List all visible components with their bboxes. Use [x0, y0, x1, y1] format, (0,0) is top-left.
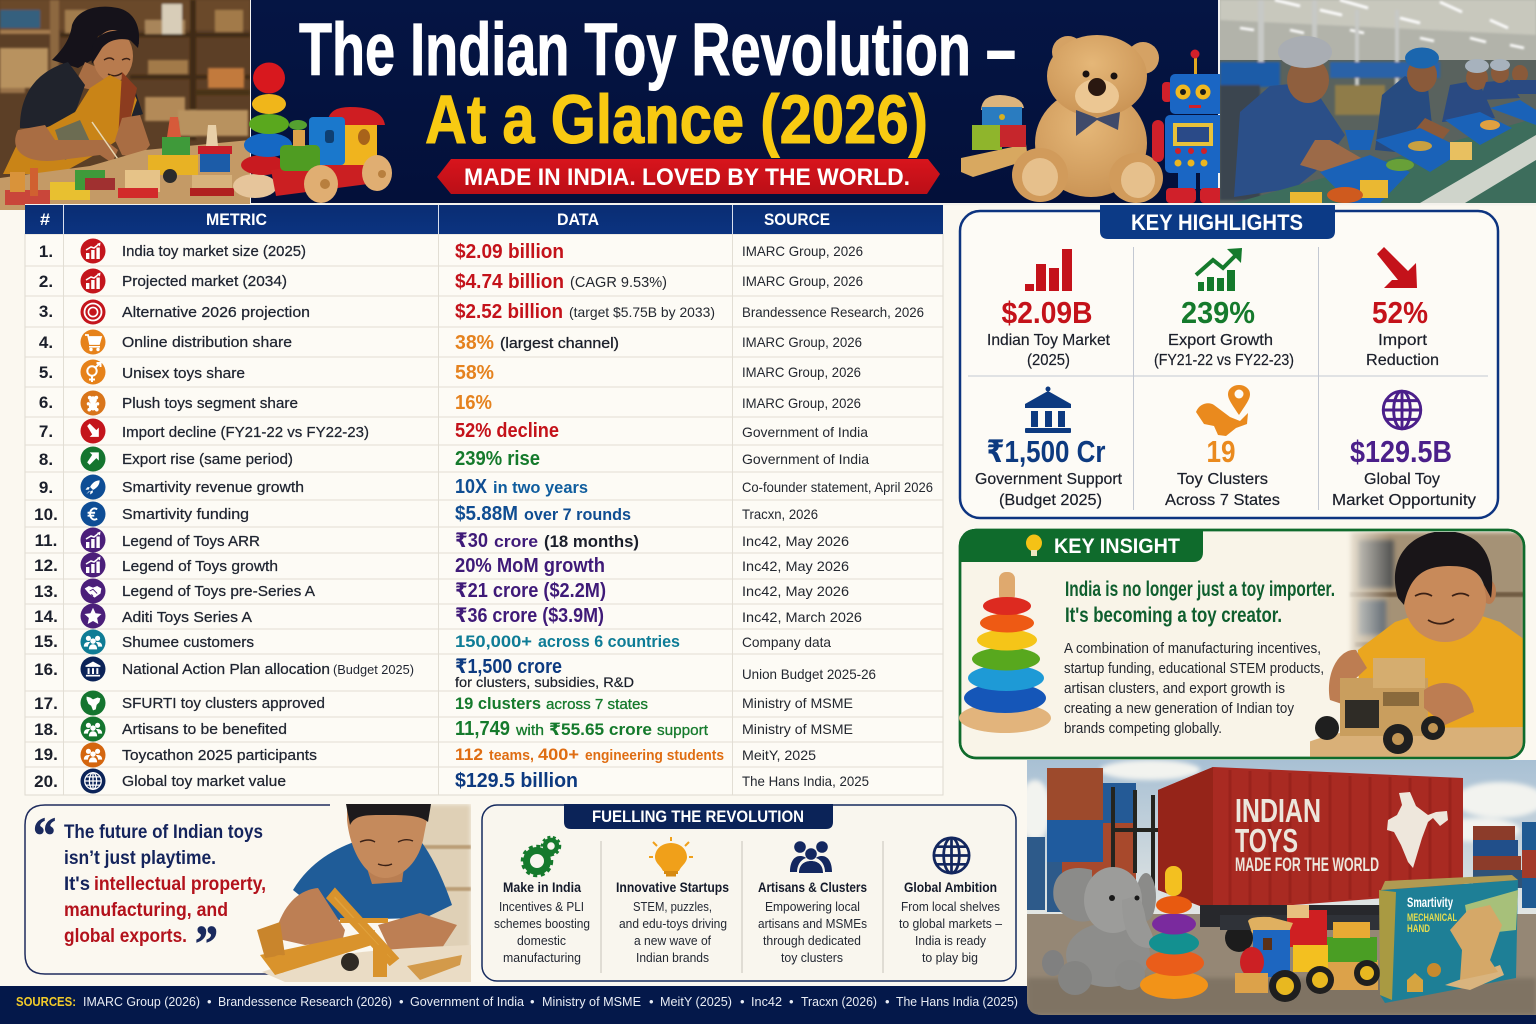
row 17	[34, 690, 853, 716]
row 12: Legend of Toys growth	[122, 558, 278, 575]
stat: toy clusters	[1165, 385, 1280, 509]
stat: government support	[975, 386, 1123, 509]
footer: sources: •	[530, 994, 535, 1009]
footer: sources: SOURCES:	[16, 994, 76, 1009]
footer: sources: Tracxn (2026)	[801, 994, 877, 1009]
column: innovative startups: Innovative Startups	[616, 880, 729, 895]
column: innovative startups: and edu-toys driving	[619, 917, 727, 931]
row 16: ₹1,500 crore	[455, 656, 562, 678]
row 15: Shumee customers	[122, 634, 254, 651]
column: global ambition	[899, 838, 1002, 965]
row 14: Inc42, March 2026	[742, 609, 862, 625]
row 14: Aditi Toys Series A	[122, 609, 252, 626]
heading: key highlights: KEY HIGHLIGHTS	[1131, 210, 1303, 235]
row 15	[34, 630, 831, 654]
row 1: IMARC Group, 2026	[742, 243, 863, 259]
illustration: robot toy	[1152, 50, 1241, 203]
row 18: Ministry of MSME	[742, 721, 853, 737]
row 8	[39, 446, 869, 472]
row 4: IMARC Group, 2026	[742, 334, 862, 350]
quote text: The future of Indian toys	[64, 821, 263, 843]
column: make in india: schemes boosting	[494, 917, 590, 931]
footer: sources: •	[649, 994, 654, 1009]
insight body text: brands competing globally.	[1064, 721, 1222, 737]
row 4	[39, 330, 862, 354]
row 15: 150,000+	[455, 632, 532, 651]
quote text: global exports.	[64, 925, 187, 947]
column: global ambition: Global Ambition	[904, 880, 997, 895]
woman	[52, 7, 139, 68]
row 20: Global toy market value	[122, 773, 286, 790]
row 6: 6.	[39, 393, 53, 412]
row 5: IMARC Group, 2026	[742, 364, 861, 380]
row 16: for clusters, subsidies, R&D	[455, 674, 634, 690]
row 17: 19 clusters	[455, 694, 541, 713]
insight headline: It's becoming a toy creator.	[1065, 604, 1282, 627]
row 15: Company data	[742, 634, 831, 650]
insight body text: artisan clusters, and export growth is	[1064, 681, 1285, 697]
row 1: $2.09 billion	[455, 241, 564, 263]
illustration: Smartivity product box: HAND	[1407, 923, 1430, 935]
row 1: India toy market size (2025)	[122, 243, 306, 260]
row 4: Online distribution share	[122, 334, 292, 351]
stat: Indian toy market: $2.09B	[1002, 295, 1092, 330]
container text: INDIAN	[1235, 792, 1321, 829]
row 11: 11.	[35, 531, 57, 550]
row 11: Legend of Toys ARR	[122, 533, 260, 550]
icon: india map	[1387, 792, 1448, 868]
row 19: Toycathon 2025 participants	[122, 747, 317, 764]
row 10: $5.88M	[455, 503, 518, 525]
row 4: (largest channel)	[500, 335, 619, 352]
row 15: across 6 countries	[538, 632, 680, 651]
stat: export growth: Export Growth	[1168, 332, 1273, 349]
row 11: ₹30	[455, 530, 488, 552]
illustration: Smartivity product box: Smartivity	[1407, 894, 1453, 910]
quote text: manufacturing, and	[64, 899, 228, 921]
insight headline	[1065, 578, 1335, 627]
row 6: 16%	[455, 392, 492, 414]
photo: woman artisan painting toys	[0, 0, 250, 210]
row 5: 58%	[455, 362, 494, 384]
row 17: across 7 states	[546, 696, 648, 713]
footer: sources	[0, 986, 1536, 1024]
row 16: Union Budget 2025-26	[742, 666, 876, 682]
heading: key insight: KEY INSIGHT	[1054, 534, 1180, 558]
row 4: 38%	[455, 332, 494, 354]
column: global ambition: to global markets –	[899, 917, 1002, 931]
row 7: Government of India	[742, 424, 868, 440]
row 16: National Action Plan allocation	[122, 661, 330, 678]
row 18: with	[515, 722, 544, 739]
footer: sources: •	[399, 994, 404, 1009]
row 18: 11,749	[455, 718, 510, 740]
row 11: crore	[494, 532, 538, 551]
row 9: 9.	[39, 478, 53, 497]
row 9: Co-founder statement, April 2026	[742, 479, 933, 495]
column: make in india: domestic	[517, 934, 566, 948]
row 2: $4.74 billion	[455, 271, 564, 293]
stat: toy clusters: 19	[1206, 434, 1236, 469]
row 8: Export rise (same period)	[122, 451, 293, 468]
stat: Indian toy market: (2025)	[1027, 352, 1070, 369]
column: artisans and clusters: through dedicated	[763, 934, 861, 948]
row 3: Brandessence Research, 2026	[742, 304, 924, 320]
illustration: teddy bear	[1012, 35, 1163, 203]
stat: global toy market: $129.5B	[1350, 434, 1452, 469]
row 13: 13.	[34, 582, 58, 601]
row 9	[39, 474, 933, 500]
stat: export growth: (FY21-22 vs FY22-23)	[1154, 352, 1294, 369]
photo: factory workers on conveyor line	[1220, 0, 1536, 203]
row 10: 10.	[34, 505, 58, 524]
footer: sources: •	[740, 994, 745, 1009]
row 3: 3.	[39, 302, 53, 321]
row 13	[34, 578, 849, 604]
stat: import reduction: Import	[1378, 332, 1428, 349]
row 9: Smartivity revenue growth	[122, 479, 304, 496]
quote marks: “	[33, 808, 56, 865]
column: artisans and clusters: toy clusters	[781, 951, 843, 965]
row 16: (Budget 2025)	[333, 662, 414, 677]
row 14: 14.	[34, 607, 58, 626]
row 7: Import decline (FY21-22 vs FY22-23)	[122, 424, 369, 441]
stat: import reduction	[1366, 247, 1439, 369]
stat: Indian toy market: Indian Toy Market	[987, 332, 1111, 349]
conveyor and bins	[1234, 118, 1536, 203]
column: global ambition: India is ready	[915, 934, 987, 948]
container text: TOYS	[1235, 822, 1298, 859]
red container	[1158, 767, 1463, 952]
row 9: 10X	[455, 476, 488, 498]
row 4: 4.	[39, 333, 53, 352]
table header: #	[40, 211, 50, 229]
row 9: in two years	[493, 478, 588, 497]
column: make in india: Make in India	[503, 880, 581, 895]
quote text: isn’t just playtime.	[64, 847, 216, 869]
quote text: It's	[64, 873, 90, 895]
panel: key highlights	[960, 205, 1498, 518]
row 13: Inc42, May 2026	[742, 583, 849, 599]
row 3: (target $5.75B by 2033)	[569, 304, 715, 320]
footer: sources: IMARC Group (2026)	[83, 994, 200, 1009]
illustration: stacking rings	[1140, 866, 1208, 999]
photo: boy assembling wooden plane	[257, 804, 471, 982]
footer: sources: Government of India	[410, 994, 525, 1009]
row 2	[39, 268, 863, 294]
column: make in india	[494, 837, 590, 965]
container text	[1235, 799, 1378, 871]
row 13: ₹21 crore ($2.2M)	[455, 580, 606, 602]
footer: sources: Ministry of MSME	[542, 994, 641, 1009]
header banner	[0, 0, 1536, 210]
stat: global toy market: Global Toy	[1364, 471, 1440, 488]
row 2: Projected market (2034)	[122, 273, 287, 290]
column: innovative startups: STEM, puzzles,	[633, 900, 712, 914]
row 17: Ministry of MSME	[742, 695, 853, 711]
row 19: teams,	[489, 747, 534, 764]
row 16	[34, 656, 876, 690]
row 19	[34, 742, 816, 768]
column: global ambition: to play big	[922, 951, 978, 965]
row 14: ₹36 crore ($3.9M)	[455, 605, 604, 627]
table header: SOURCE	[764, 211, 830, 229]
heading: fuelling the revolution: FUELLING THE REVOLUTION	[592, 808, 804, 826]
row 19: 400+	[538, 745, 579, 764]
row 12: Inc42, May 2026	[742, 558, 849, 574]
illustration: Smartivity product box: MECHANICAL	[1407, 912, 1457, 924]
table and toys	[0, 140, 250, 210]
stat: Indian toy market	[987, 249, 1111, 369]
row 10: Tracxn, 2026	[742, 506, 818, 522]
row 11: (18 months)	[544, 532, 639, 551]
stat: government support: ₹1,500 Cr	[986, 434, 1106, 469]
illustration: stacking ring toy	[959, 572, 1051, 733]
row 20	[34, 768, 869, 794]
column: artisans and clusters: Empowering local	[765, 900, 860, 914]
panel: key insight	[959, 529, 1525, 758]
row 19: 19.	[34, 745, 58, 764]
footer: sources: •	[885, 994, 890, 1009]
column: innovative startups	[616, 837, 729, 965]
row 20: $129.5 billion	[455, 770, 578, 792]
table header: DATA	[557, 211, 599, 229]
row 12: 12.	[34, 556, 58, 575]
data table	[25, 205, 943, 795]
row 8: Government of India	[742, 451, 869, 467]
quote marks: ”	[195, 916, 218, 973]
row 12	[34, 552, 849, 578]
row 19: engineering students	[585, 747, 724, 764]
right container stacks	[1473, 822, 1536, 908]
insight body text: A combination of manufacturing incentives,	[1064, 641, 1321, 657]
row 18: ₹55.65 crore	[549, 720, 652, 739]
stat: export growth	[1154, 248, 1294, 369]
row 7: 7.	[39, 422, 53, 441]
table header	[25, 205, 943, 234]
footer: sources: •	[789, 994, 794, 1009]
row 5: Unisex toys share	[122, 365, 245, 382]
stat: global toy market: Market Opportunity	[1332, 492, 1476, 509]
column: innovative startups: Indian brands	[636, 951, 709, 965]
photo: shipping container with toys	[1019, 760, 1536, 1015]
panel: fuelling the revolution	[482, 804, 1016, 981]
row 18	[34, 716, 853, 742]
stat: toy clusters: Toy Clusters	[1177, 471, 1268, 488]
row 19: 112	[455, 745, 483, 764]
footer: sources: The Hans India (2025)	[896, 994, 1018, 1009]
insight body text	[1064, 641, 1324, 737]
insight body text: creating a new generation of Indian toy	[1064, 701, 1295, 717]
row 18: Artisans to be benefited	[122, 721, 287, 738]
row 7	[39, 418, 868, 444]
title: The Indian Toy Revolution –	[299, 8, 1016, 91]
stat: import reduction: 52%	[1372, 295, 1428, 330]
row 1: 1.	[39, 242, 53, 261]
row 8: 8.	[39, 450, 53, 469]
row 3	[39, 300, 924, 324]
heading: fuelling the revolution	[564, 804, 833, 829]
row 3: Alternative 2026 projection	[122, 304, 310, 321]
row 17: SFURTI toy clusters approved	[122, 695, 325, 712]
title	[299, 8, 1016, 158]
row 15: 15.	[34, 632, 58, 651]
illustration: toy train	[1235, 905, 1380, 1002]
column: make in india: Incentives & PLI	[499, 900, 584, 914]
left container stacks	[1027, 768, 1160, 912]
stat: government support: Government Support	[975, 471, 1123, 488]
illustration: plush elephant	[1042, 867, 1156, 995]
footer: sources: MeitY (2025)	[660, 994, 732, 1009]
row 5	[39, 360, 861, 384]
row 6: Plush toys segment share	[122, 395, 298, 412]
row 2: IMARC Group, 2026	[742, 273, 863, 289]
row 8: 239% rise	[455, 448, 540, 470]
footer: sources: Brandessence Research (2026)	[218, 994, 392, 1009]
row 18: support	[657, 722, 709, 739]
footer: sources: •	[207, 994, 212, 1009]
insight body text: startup funding, educational STEM products,	[1064, 661, 1324, 677]
container text: MADE FOR THE WORLD	[1235, 855, 1379, 876]
heading: key highlights	[1100, 205, 1335, 239]
stat: global toy market	[1332, 391, 1476, 509]
stat: toy clusters: Across 7 States	[1165, 492, 1280, 509]
column: artisans and clusters	[758, 841, 867, 965]
row 6: IMARC Group, 2026	[742, 395, 861, 411]
row 1	[39, 238, 863, 264]
row 10: Smartivity funding	[122, 506, 249, 523]
row 16: 16.	[34, 660, 58, 679]
table header: METRIC	[206, 211, 267, 229]
quote text: intellectual property,	[94, 873, 266, 895]
row 11: Inc42, May 2026	[742, 533, 849, 549]
row 20: 20.	[34, 772, 58, 791]
column: artisans and clusters: artisans and MSMEs	[758, 917, 867, 931]
row 2: (CAGR 9.53%)	[570, 274, 667, 291]
stat: government support: (Budget 2025)	[999, 492, 1102, 509]
row 10	[34, 502, 818, 526]
row 12: 20% MoM growth	[455, 555, 605, 577]
stat: export growth: 239%	[1181, 295, 1255, 330]
row 2: 2.	[39, 272, 53, 291]
quote marks	[33, 808, 218, 973]
row 6	[39, 390, 861, 416]
stat: import reduction: Reduction	[1366, 352, 1439, 369]
row 17: 17.	[34, 694, 58, 713]
photo: boy building wooden truck	[1300, 531, 1525, 758]
heading: key insight	[960, 529, 1203, 562]
row 20: The Hans India, 2025	[742, 773, 869, 789]
row 10: over 7 rounds	[524, 505, 631, 524]
column: artisans and clusters: Artisans & Clusters	[758, 880, 867, 895]
illustration: stacking rings and wooden train	[233, 62, 392, 203]
column: make in india: manufacturing	[503, 951, 581, 965]
insight headline: India is no longer just a toy importer.	[1065, 578, 1335, 601]
row 5: 5.	[39, 363, 53, 382]
workers	[1442, 80, 1495, 122]
row 14	[34, 604, 862, 628]
title: At a Glance (2026)	[425, 81, 928, 158]
footer: sources: Inc42	[751, 994, 782, 1009]
row 13: Legend of Toys pre-Series A	[122, 583, 315, 600]
row 19: MeitY, 2025	[742, 747, 816, 763]
row 3: $2.52 billion	[455, 301, 563, 323]
column: innovative startups: a new wave of	[634, 934, 711, 948]
row 18: 18.	[34, 720, 58, 739]
panel: quote	[25, 804, 471, 982]
ribbon tagline: MADE IN INDIA. LOVED BY THE WORLD.	[464, 164, 910, 191]
illustration: wooden blocks	[961, 95, 1028, 177]
column: global ambition: From local shelves	[901, 900, 1000, 914]
illustration: Smartivity product box	[1379, 875, 1518, 1003]
quote text	[64, 821, 266, 947]
row 11	[35, 528, 849, 552]
row 7: 52% decline	[455, 420, 559, 442]
